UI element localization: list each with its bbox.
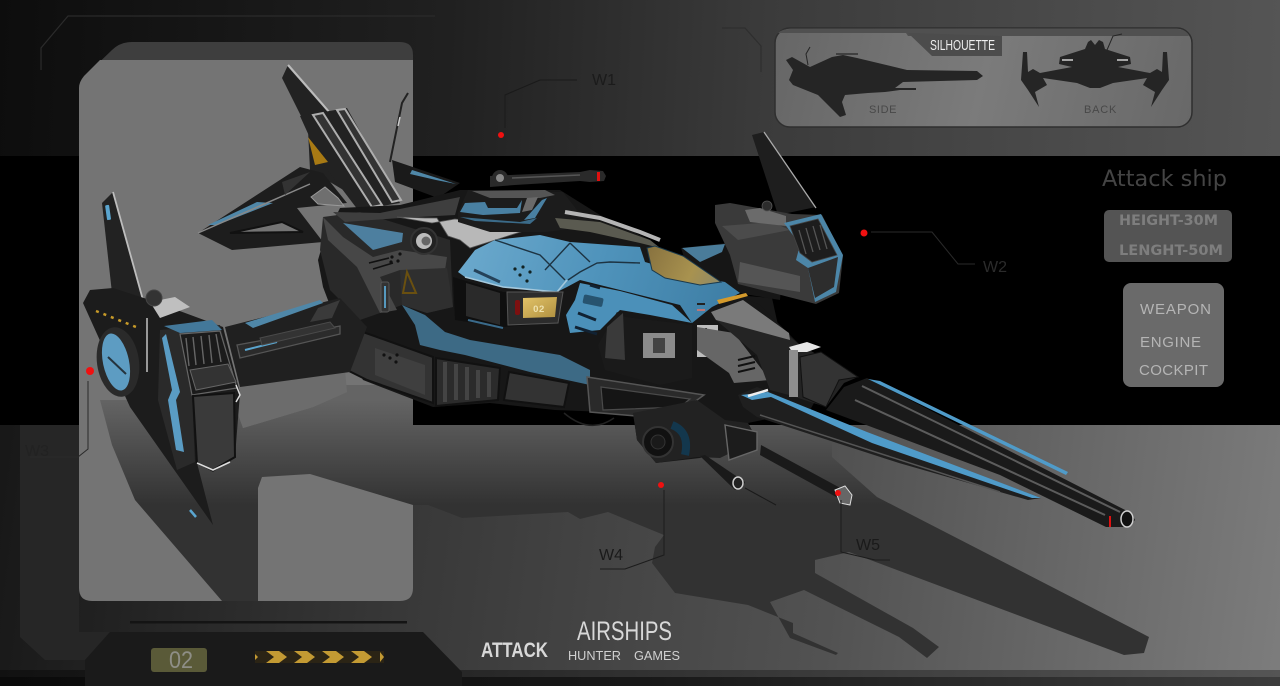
mid fuselage panels [598,300,858,407]
far right engine pod [681,132,843,345]
rear dorsal fin and twin columns [282,65,460,210]
systems list box: COCKPIT [1139,362,1208,379]
callout W3 [25,367,94,460]
panel: light backdrop [79,42,413,601]
back label: BACK [1084,104,1117,116]
background: black middle band [0,156,1280,425]
background: floor [0,425,1280,686]
logo: GAMES: GAMES [634,648,680,663]
lower blade cannon [738,387,1041,500]
landing strut and wheel [633,400,757,463]
callout W5: W5 [856,537,880,554]
silhouette tab: SILHOUETTE [930,37,995,54]
white top plating [397,217,533,248]
callout W3: W3 [25,443,49,460]
logo: HUNTER: HUNTER [568,648,621,663]
callout W1 [498,72,616,138]
floor shadow of the ship [100,370,1149,658]
dimensions box: LENGHT-50M [1119,243,1223,259]
left spike wing [198,167,347,250]
rear hull side panels [320,197,460,320]
callout W1: W1 [592,72,616,89]
frame line top left [41,16,435,70]
left engine pod [83,192,240,525]
callout W2 [860,230,1007,276]
blue armour dome [458,212,748,334]
panel: silhouette [775,28,1192,127]
badge 02 [151,647,207,674]
bottom gradient strip [0,670,1280,686]
lower guns [700,445,852,505]
systems list box: WEAPON [1140,301,1211,318]
main cannon barrel [826,378,1135,527]
gun turret with cannon [458,170,606,232]
background: top band [0,0,1280,156]
systems list box: ENGINE [1140,334,1201,351]
black box under dome [453,277,563,327]
side view silhouette [786,47,983,117]
silhouette tab [908,33,1002,56]
dimensions box [1104,210,1232,262]
underbelly armour blocks [345,332,704,425]
callout W4: W4 [599,547,623,564]
callout W4 [599,482,664,569]
left arm strut [225,298,367,387]
title: Attack ship: Attack ship [1102,166,1227,192]
logo: ATTACK: ATTACK [481,639,548,662]
illustration: attack ship [83,65,1135,527]
left dark frame shape [20,425,110,660]
systems list box [1123,283,1224,387]
side label: SIDE [869,104,897,116]
main hull dark body [318,190,830,463]
back view silhouette [1021,34,1169,107]
lower blue hull band [402,305,590,385]
bottom bar [85,621,462,686]
callout W5 [835,490,890,560]
callout W2: W2 [983,259,1007,276]
dimensions box: HEIGHT-30M [1119,213,1218,229]
number plate 02 [466,283,563,328]
number plate 02: 02 [533,304,545,315]
badge 02: 02 [169,647,193,674]
logo: AIRSHIPS: AIRSHIPS [577,616,672,646]
chevron arrows [255,651,384,663]
frame line top right [722,28,761,72]
